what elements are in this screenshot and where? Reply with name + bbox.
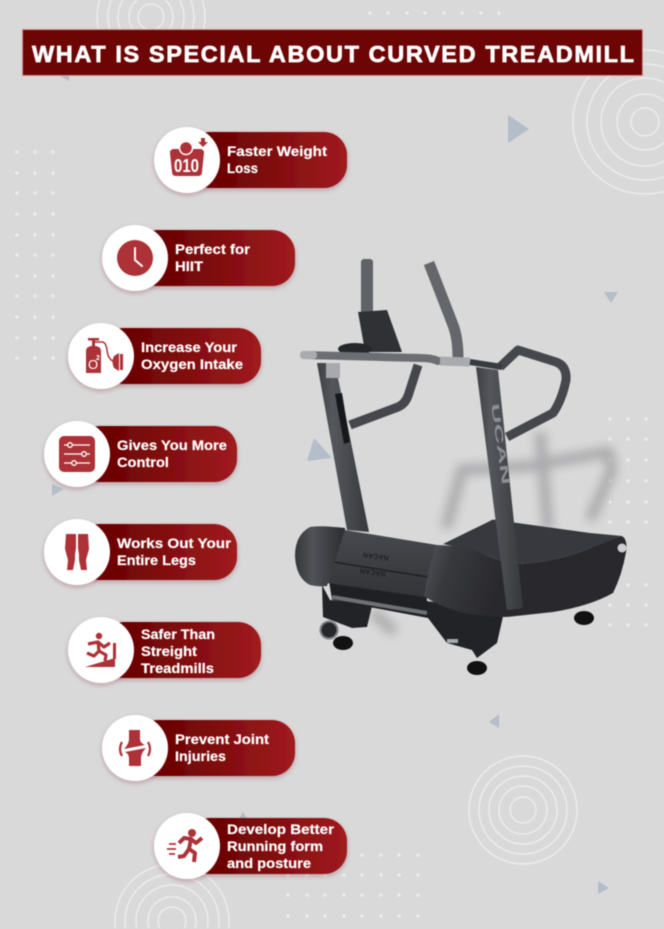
- benefit: Gives You More Control: [44, 421, 237, 487]
- drum seam: [333, 562, 428, 577]
- decorative dots: bottom: [286, 853, 420, 918]
- left side rail: [350, 365, 418, 425]
- label: Increase Your: [141, 340, 238, 355]
- decorative dots: top: [368, 11, 501, 15]
- decorative ring cluster: bottom left: [115, 864, 229, 928]
- label: [227, 822, 335, 871]
- icon: sliders: [59, 436, 95, 472]
- left base: [322, 585, 372, 628]
- silver bracket: [447, 639, 458, 643]
- icon: weighing scale: [170, 138, 208, 176]
- label: [175, 242, 251, 274]
- title banner: [22, 30, 642, 76]
- deck side: [470, 536, 626, 617]
- label: [141, 627, 215, 676]
- drum brand text: NACAN: [363, 550, 389, 561]
- upright grip right: [429, 263, 458, 358]
- label: Faster Weight: [227, 144, 328, 159]
- upright grip left: [361, 259, 373, 314]
- drum middle: [327, 530, 437, 597]
- handlebar link: [470, 362, 502, 367]
- post label: [335, 393, 350, 444]
- label: Streight: [141, 644, 198, 659]
- label: Oxygen Intake: [141, 357, 244, 372]
- right post: [476, 367, 523, 610]
- decorative ring cluster: top: [97, 0, 205, 71]
- deck badge: [618, 544, 626, 552]
- treadmill product image: [295, 259, 626, 675]
- title text: WHAT IS SPECIAL ABOUT CURVED TREADMILL: [32, 41, 634, 67]
- label: Loss: [227, 161, 258, 176]
- icon: weighing scale: 010: [174, 156, 199, 176]
- icon: running man: [167, 829, 202, 862]
- label: Safer Than: [141, 627, 215, 642]
- label: HIIT: [175, 259, 204, 274]
- deck surface: [443, 520, 622, 564]
- label: Perfect for: [175, 242, 251, 257]
- drum left cap: [295, 526, 345, 586]
- post brand text: UCAN: [488, 403, 511, 486]
- label: Gives You More: [117, 438, 228, 453]
- left post: [317, 363, 369, 532]
- drum lower dark: [327, 568, 428, 618]
- label: and posture: [227, 856, 312, 871]
- decorative ring cluster: right: [573, 50, 664, 194]
- label: Treadmills: [141, 661, 214, 676]
- icon: oxygen tank and mask: 2: [96, 355, 100, 362]
- right end cap: [424, 545, 506, 617]
- label: Injuries: [175, 749, 226, 764]
- label: [175, 732, 270, 764]
- benefit: Safer Than Streight Treadmills: [68, 617, 261, 683]
- label: Entire Legs: [117, 553, 196, 568]
- icon: oxygen tank and mask: O: [88, 357, 98, 372]
- benefit: Increase Your Oxygen Intake: [68, 323, 261, 389]
- icon: knee joint: [120, 730, 150, 766]
- decorative ring cluster: bottom right: [469, 756, 577, 864]
- label: [117, 536, 232, 568]
- label: Control: [117, 455, 169, 470]
- handlebar: [304, 355, 438, 361]
- console: [358, 310, 402, 352]
- silver foot bar: [332, 597, 427, 613]
- label: [227, 144, 328, 176]
- castor wheel: [320, 622, 338, 638]
- label: [141, 340, 244, 372]
- decorative dots: right: [608, 417, 648, 627]
- right base: [420, 600, 504, 658]
- label: Running form: [227, 839, 323, 854]
- decorative triangles: [52, 76, 618, 894]
- drum brand text lower: NACAN: [360, 566, 386, 577]
- benefit: Works Out Your Entire Legs: [44, 519, 237, 585]
- console base: [338, 343, 372, 355]
- benefit: Prevent Joint Injuries: [102, 715, 295, 781]
- handlebar silver sleeve: [440, 361, 470, 362]
- label: Works Out Your: [117, 536, 232, 551]
- icon: runner on treadmill: [85, 633, 116, 667]
- handlebar silver end: [300, 351, 317, 359]
- label: Develop Better: [227, 822, 335, 837]
- icon: legs: [65, 534, 89, 570]
- label: [117, 438, 228, 470]
- benefit: Develop Better Running form and posture: [154, 813, 347, 879]
- decorative dots: left: [15, 150, 55, 360]
- icon: oxygen tank and mask: [86, 338, 123, 373]
- icon: clock: [117, 240, 153, 276]
- foot centre: [467, 661, 487, 675]
- foot left: [333, 636, 353, 650]
- benefit: Faster Weight Loss: [154, 127, 347, 193]
- benefit: Perfect for HIIT: [102, 225, 295, 291]
- post bracket: [326, 363, 340, 378]
- right side rail: [500, 350, 566, 437]
- treadmill cast shadow: [372, 432, 612, 632]
- label: Prevent Joint: [175, 732, 270, 747]
- foot right: [574, 611, 594, 625]
